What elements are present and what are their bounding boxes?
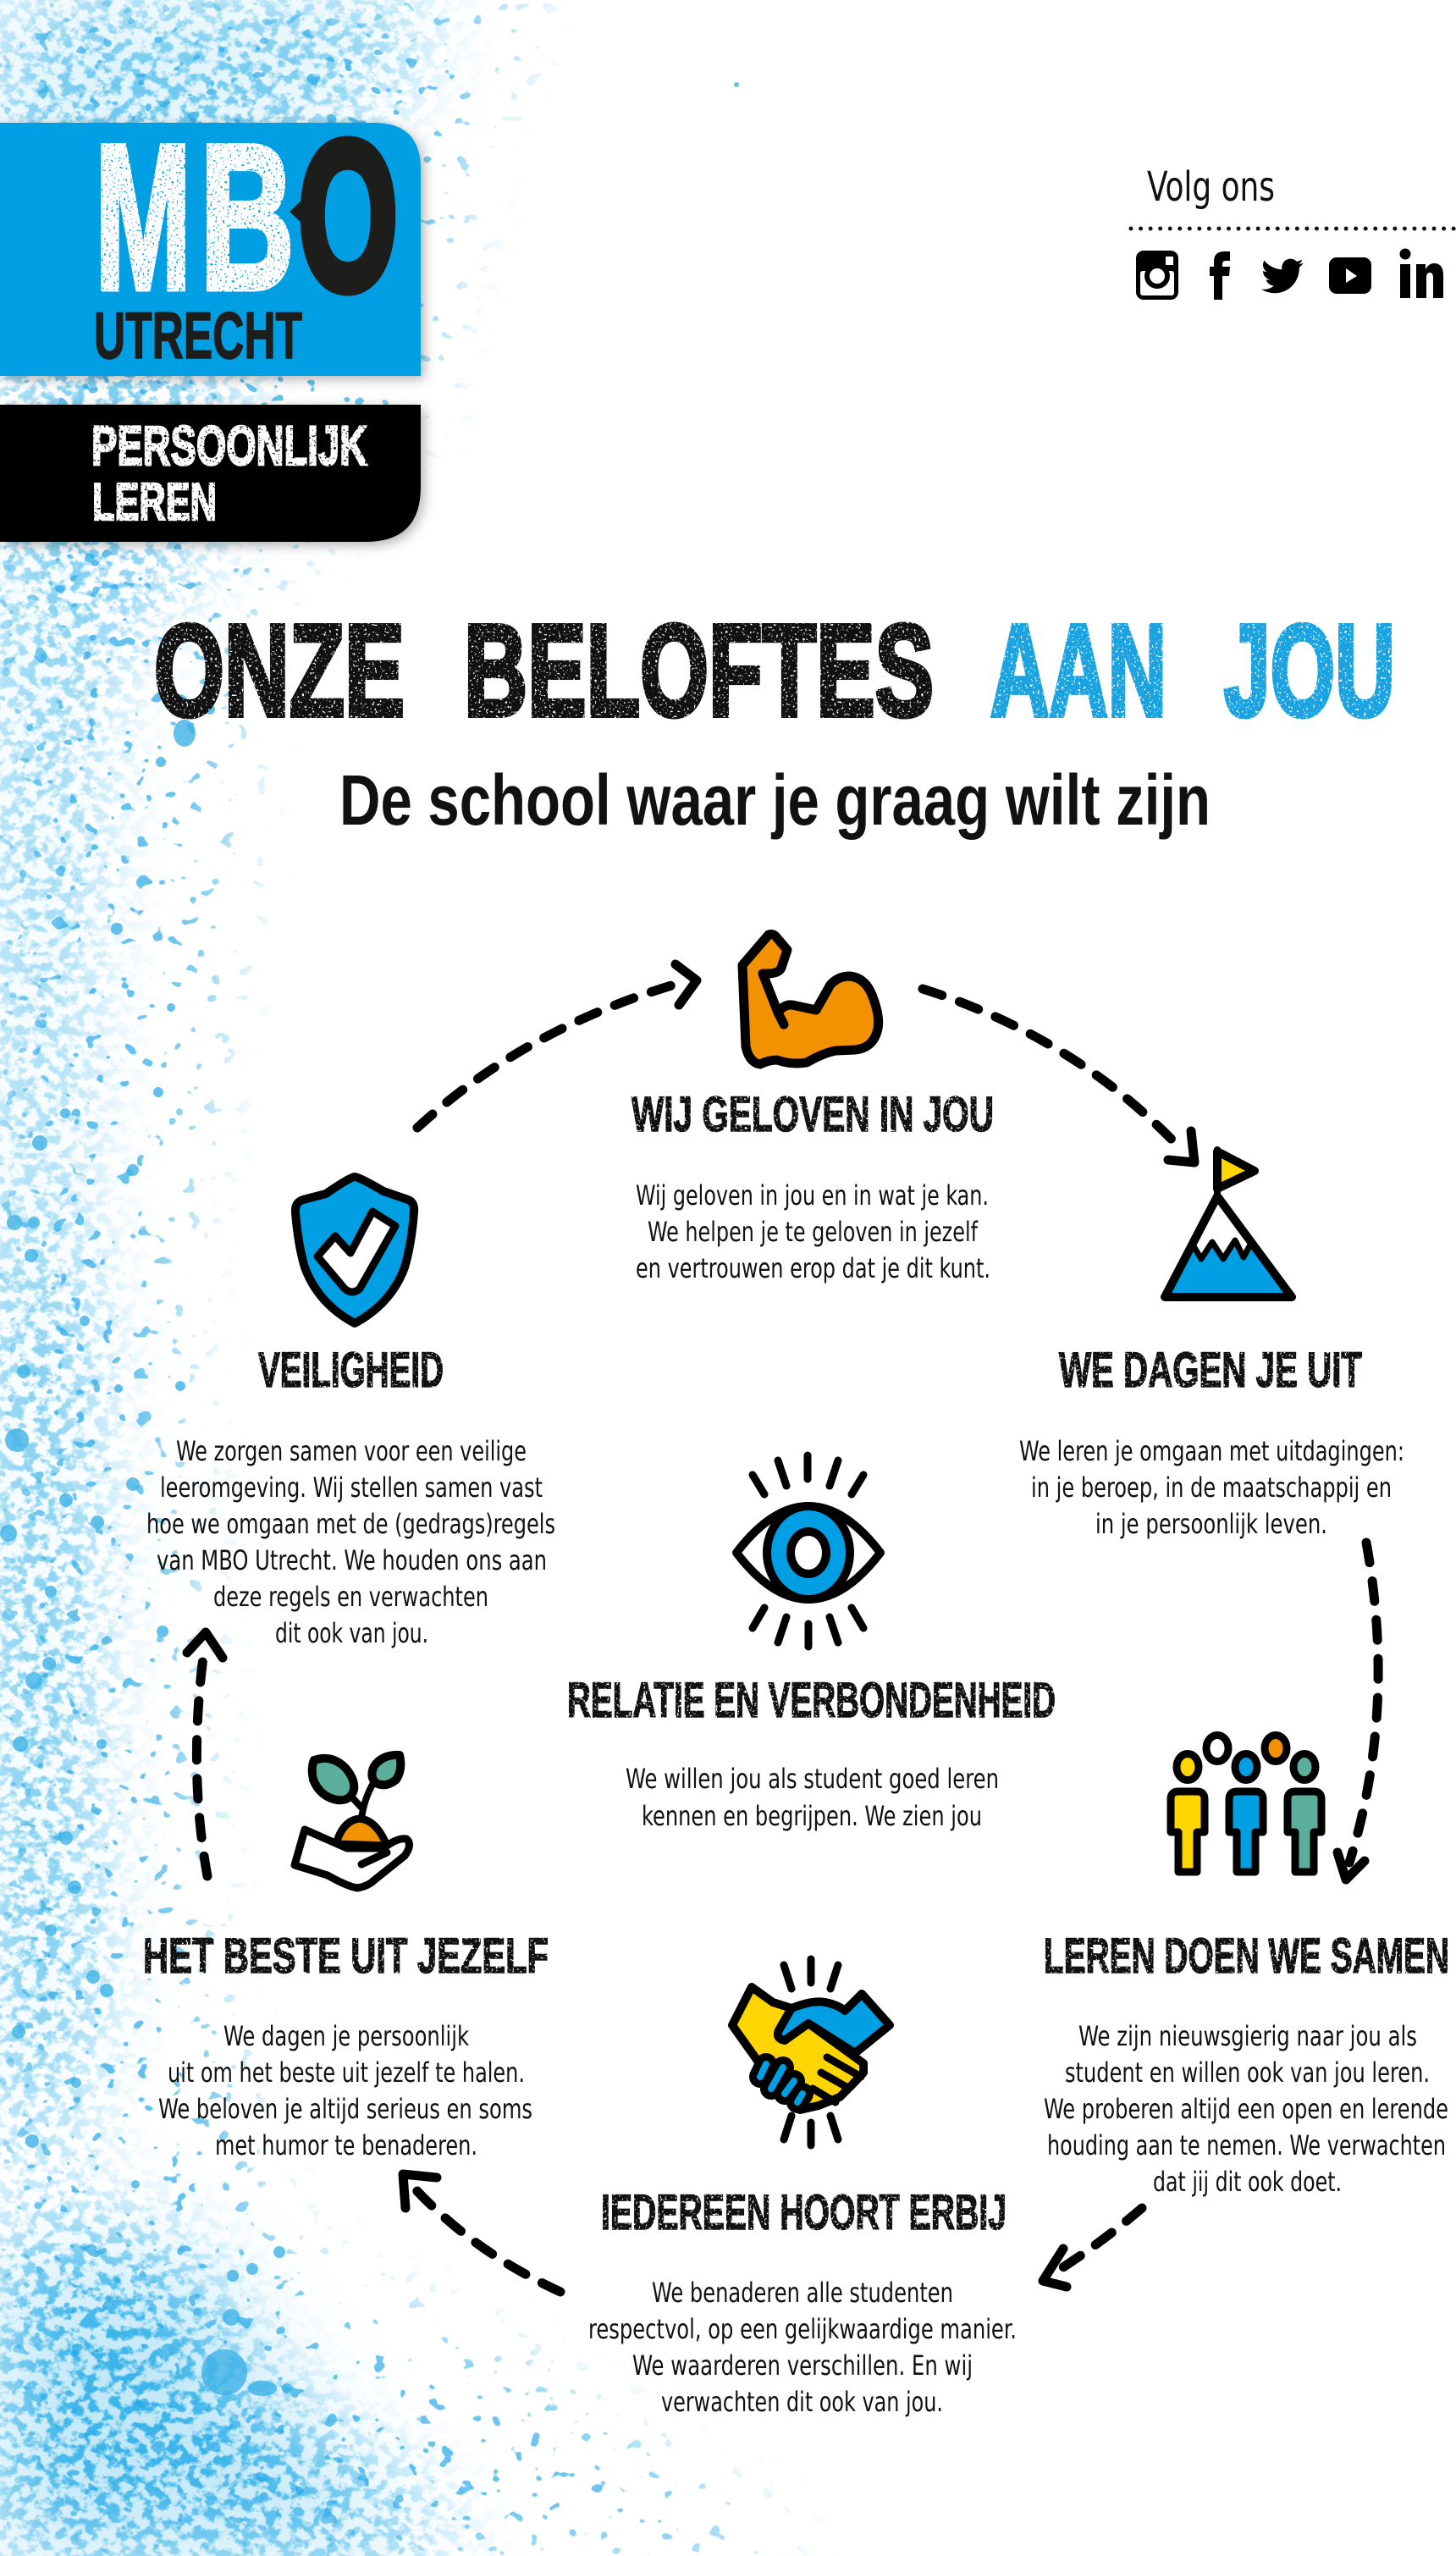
background: blue paint splatter: [0, 0, 804, 2556]
text: We helpen je te geloven in jezelf: [648, 1216, 979, 1248]
arrow: veiligheid to wij geloven: [417, 964, 697, 1128]
icon: linkedin: [1400, 249, 1443, 298]
icon: eye: [736, 1455, 880, 1647]
text: respectvol, op een gelijkwaardige manier.: [588, 2313, 1017, 2345]
panel: het beste uit jezelf: [143, 1755, 549, 2161]
text: [1019, 1435, 1404, 1540]
text: [158, 2020, 532, 2161]
logo word Utrecht: UTRECHT: [94, 298, 302, 373]
text: uit om het beste uit jezelf te halen.: [168, 2056, 525, 2089]
icon: instagram: [1136, 251, 1178, 300]
heading: IEDEREEN HOORT ERBIJ: [601, 2185, 1007, 2240]
logo letters MB: B: [200, 101, 295, 333]
text: in je beroep, in de maatschappij en: [1031, 1471, 1392, 1504]
text: kennen en begrijpen. We zien jou: [642, 1800, 982, 1832]
text: dit ook van jou.: [275, 1617, 428, 1649]
arrow: leren doen to iedereen: [1043, 2208, 1142, 2287]
subtitle: De school waar je graag wilt zijn: [339, 760, 1211, 840]
logo letter O with speech point: [290, 97, 398, 334]
text: in je persoonlijk leven.: [1095, 1508, 1327, 1540]
text: hoe we omgaan met de (gedrags)regels: [146, 1508, 555, 1540]
icon: flexed arm: [742, 935, 879, 1064]
panel: relatie en verbondenheid: [567, 1455, 1056, 1832]
icon: youtube: [1329, 257, 1371, 294]
icon: hand with sprout: [295, 1755, 410, 1888]
title: [154, 598, 1395, 743]
panel: iedereen hoort erbij: [588, 1959, 1017, 2418]
arrow: we dagen to leren doen: [1337, 1543, 1378, 1880]
text: [626, 1763, 999, 1832]
text: deze regels en verwachten: [213, 1581, 488, 1613]
text: We dagen je persoonlijk: [223, 2020, 469, 2052]
arrow: wij geloven to we dagen: [923, 989, 1194, 1162]
text: We zorgen samen voor een veilige: [176, 1435, 527, 1467]
text: leeromgeving. Wij stellen samen vast: [160, 1471, 543, 1504]
text: van MBO Utrecht. We houden ons aan: [157, 1544, 547, 1576]
heading: RELATIE EN VERBONDENHEID: [567, 1673, 1056, 1728]
panel: we dagen je uit: [1019, 1150, 1404, 1540]
heading: VEILIGHEID: [258, 1343, 444, 1398]
title: AAN: [990, 598, 1166, 743]
arrow: iedereen to het beste: [403, 2174, 560, 2292]
text: Wij geloven in jou en in wat je kan.: [636, 1179, 989, 1212]
text: We waarderen verschillen. En wij: [632, 2349, 973, 2382]
icon: handshake: [732, 1959, 890, 2145]
text: met humor te benaderen.: [215, 2129, 477, 2161]
label panel: Persoonlijk leren: LEREN: [92, 473, 217, 532]
label panel: Persoonlijk leren: [0, 405, 421, 542]
social block: [1131, 163, 1456, 300]
icon: twitter: [1261, 259, 1304, 293]
logo panel: MBO Utrecht: [0, 97, 421, 376]
icon: shield with check: [295, 1177, 414, 1323]
text: [1044, 2020, 1448, 2198]
text: verwachten dit ook van jou.: [661, 2386, 943, 2418]
icon: group of people: [1171, 1736, 1321, 1872]
text: dat jij dit ook doet.: [1153, 2166, 1342, 2198]
text: [146, 1435, 555, 1649]
icon: facebook: [1210, 251, 1230, 300]
heading: WIJ GELOVEN IN JOU: [631, 1087, 994, 1142]
text: We benaderen alle studenten: [652, 2277, 953, 2309]
logo letter O with speech point: O: [298, 97, 398, 334]
text: volg ons: Volg ons: [1147, 163, 1275, 211]
arrow: het beste to veiligheid: [187, 1632, 223, 1876]
label panel: Persoonlijk leren: PERSOONLIJK: [91, 414, 367, 477]
text: en vertrouwen erop dat je dit kunt.: [636, 1252, 990, 1284]
logo letters MB: M: [95, 101, 191, 333]
panel: veiligheid: [146, 1177, 555, 1649]
text: We beloven je altijd serieus en soms: [158, 2093, 532, 2125]
text: [588, 2277, 1017, 2418]
text: We willen jou als student goed leren: [626, 1763, 999, 1795]
panel: leren doen we samen: [1044, 1736, 1449, 2198]
title: ONZE: [154, 598, 405, 743]
title: BELOFTES: [464, 598, 934, 743]
heading: HET BESTE UIT JEZELF: [143, 1929, 549, 1984]
text: [636, 1179, 990, 1284]
icon: mountain with flag: [1165, 1150, 1292, 1297]
panel: wij geloven in jou: [631, 935, 994, 1284]
